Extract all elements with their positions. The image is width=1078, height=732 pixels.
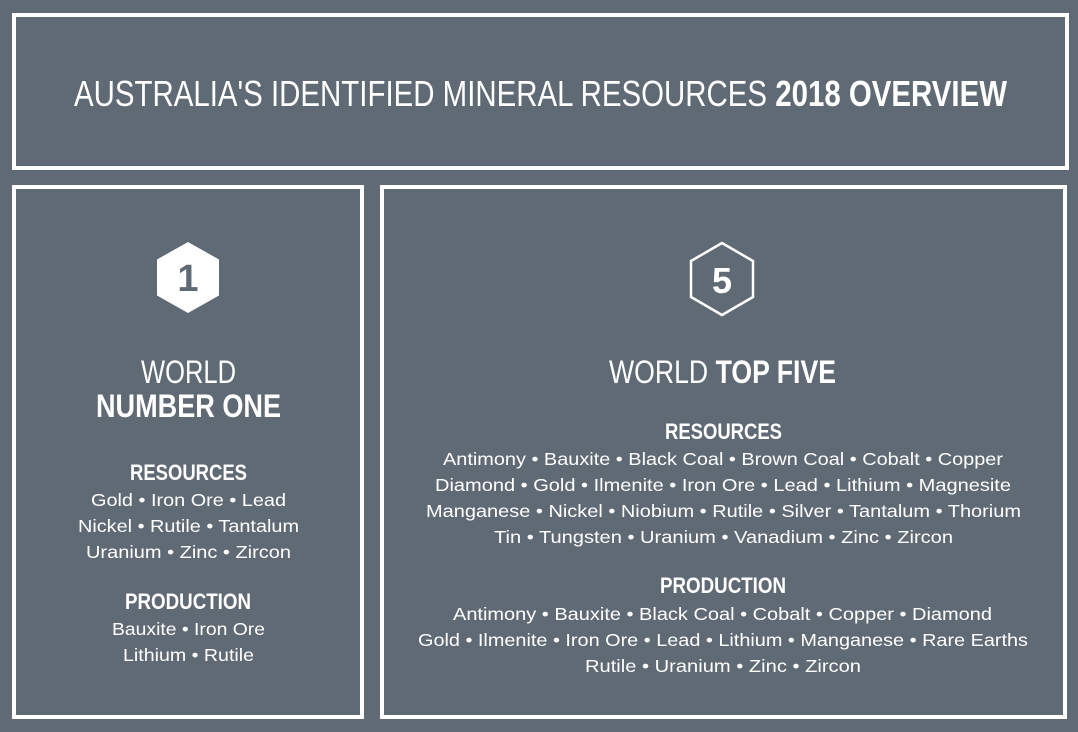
resources list right: Diamond • Gold • Ilmenite • Iron Ore • Lead • Lithium • Magnesite (435, 475, 1011, 495)
title panel (14, 15, 1067, 168)
resources list right: Antimony • Bauxite • Black Coal • Brown Coal • Cobalt • Copper (443, 449, 1003, 469)
resources list right: RESOURCES (665, 419, 782, 444)
title: AUSTRALIA'S IDENTIFIED MINERAL RESOURCES 2018 OVERVIEW (74, 73, 1007, 114)
resources list right: Manganese • Nickel • Niobium • Rutile • Silver • Tantalum • Thorium (426, 501, 1021, 521)
production list right: PRODUCTION (660, 573, 786, 598)
heading: world number one (96, 354, 281, 424)
panel: world top five (382, 187, 1065, 717)
icon: hexagon 1 (157, 242, 219, 313)
resources list right (426, 419, 1021, 547)
resources list left: Gold • Iron Ore • Lead (91, 490, 286, 510)
production list right (418, 573, 1028, 676)
resources list left: Uranium • Zinc • Zircon (86, 542, 291, 562)
resources list left: RESOURCES (130, 460, 247, 485)
production list left: Bauxite • Iron Ore (112, 619, 265, 639)
resources list left: Nickel • Rutile • Tantalum (78, 516, 299, 536)
heading: world number one: WORLD (141, 354, 236, 390)
resources list left (78, 460, 299, 562)
production list left (112, 589, 265, 665)
production list left: Lithium • Rutile (123, 645, 254, 665)
production list right: Rutile • Uranium • Zinc • Zircon (585, 656, 861, 676)
production list left: PRODUCTION (125, 589, 251, 614)
panel: world number one (14, 187, 362, 717)
resources list right: Tin • Tungsten • Uranium • Vanadium • Zinc • Zircon (494, 527, 953, 547)
production list right: Gold • Ilmenite • Iron Ore • Lead • Lithium • Manganese • Rare Earths (418, 630, 1028, 650)
heading: world number one: NUMBER ONE (96, 388, 281, 424)
icon: hexagon 5: 5 (712, 260, 732, 301)
production list right: Antimony • Bauxite • Black Coal • Cobalt • Copper • Diamond (453, 604, 992, 624)
heading: world top five: WORLD TOP FIVE (609, 354, 836, 390)
icon: hexagon 5 (691, 243, 753, 315)
icon: hexagon 1: 1 (177, 258, 199, 300)
